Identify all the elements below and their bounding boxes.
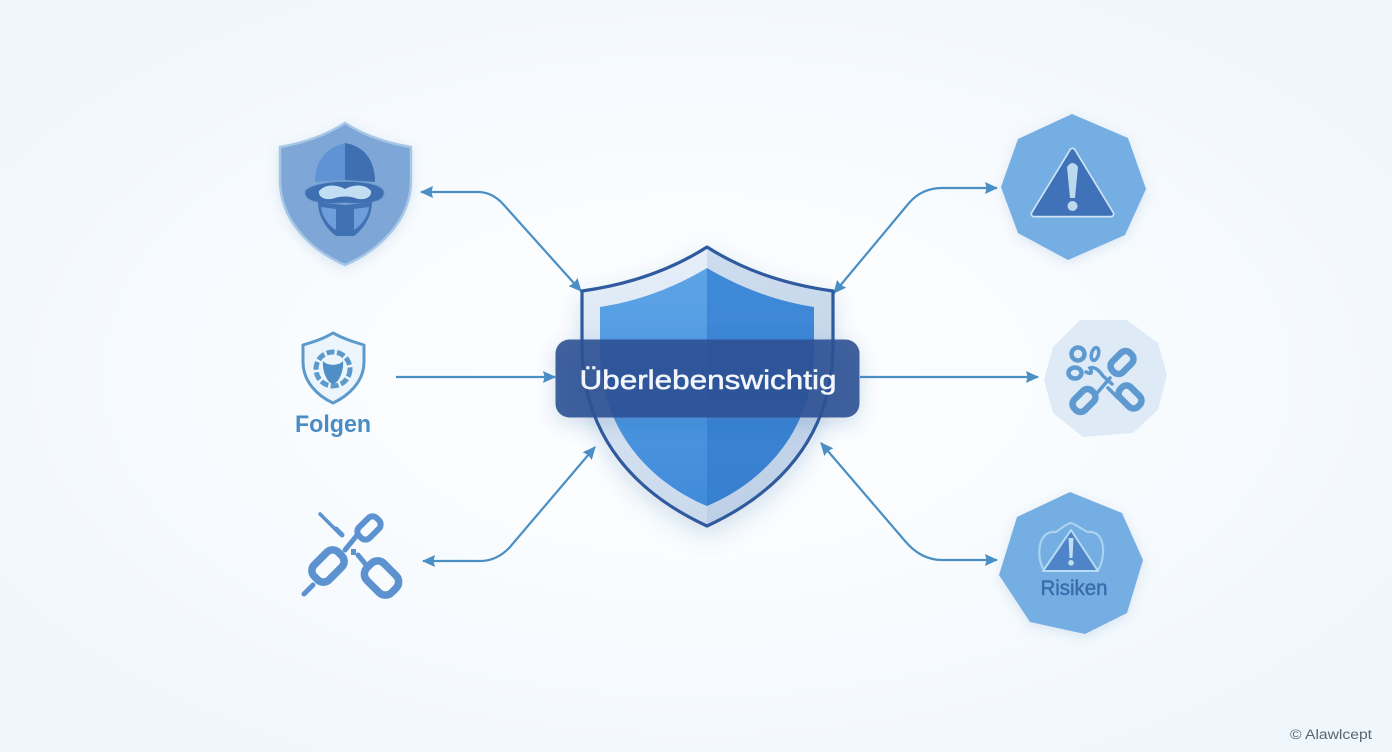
Risiken label: Risiken [1040,577,1108,600]
arrow: threat shield to central shield [421,192,581,291]
icon: Risiken octagon [999,492,1143,634]
octagon badge [1001,114,1146,260]
icon: broken chain octagon [1044,320,1167,437]
shield outline [582,247,833,526]
octagon badge [999,492,1143,634]
banner: Überlebenswichtig [556,340,860,418]
chain fragments [320,514,335,529]
warning triangle [1043,530,1098,571]
arrow: Folgen to banner [396,376,555,378]
lower-left link [309,547,347,585]
icon: masked attacker shield [280,123,411,265]
small shield [303,333,364,403]
lower-right link [361,557,402,599]
cup emblem [323,361,343,384]
arrow: banner to broken chain [860,376,1038,378]
upper link [355,514,383,542]
shield badge [280,123,411,265]
arrow: chain icon to central shield [423,447,595,561]
chain links [1068,347,1144,415]
central shield [582,247,833,526]
icon: Folgen shield with label [295,333,371,438]
bell outline [1039,523,1103,570]
watermark: © Alawlcept [1290,727,1372,742]
exclamation mark [1068,538,1074,566]
gear ring [316,352,350,386]
exclamation mark [1067,163,1078,211]
icon: warning octagon [1001,114,1146,260]
warning triangle [1034,151,1111,214]
Folgen label: Folgen [295,411,371,438]
banner label: Überlebenswichtig [580,365,836,395]
icon: broken chain left [304,514,402,599]
hat [305,143,384,204]
octagon badge [1044,320,1167,437]
center fragment [351,549,356,555]
arrow: Risiken to central shield [821,443,997,560]
mask face [318,202,372,236]
banner box [556,340,860,418]
arrow: warning icon to central shield [834,188,997,293]
shield rim [582,247,833,526]
goggles [319,185,371,199]
shield blue face [600,268,814,506]
